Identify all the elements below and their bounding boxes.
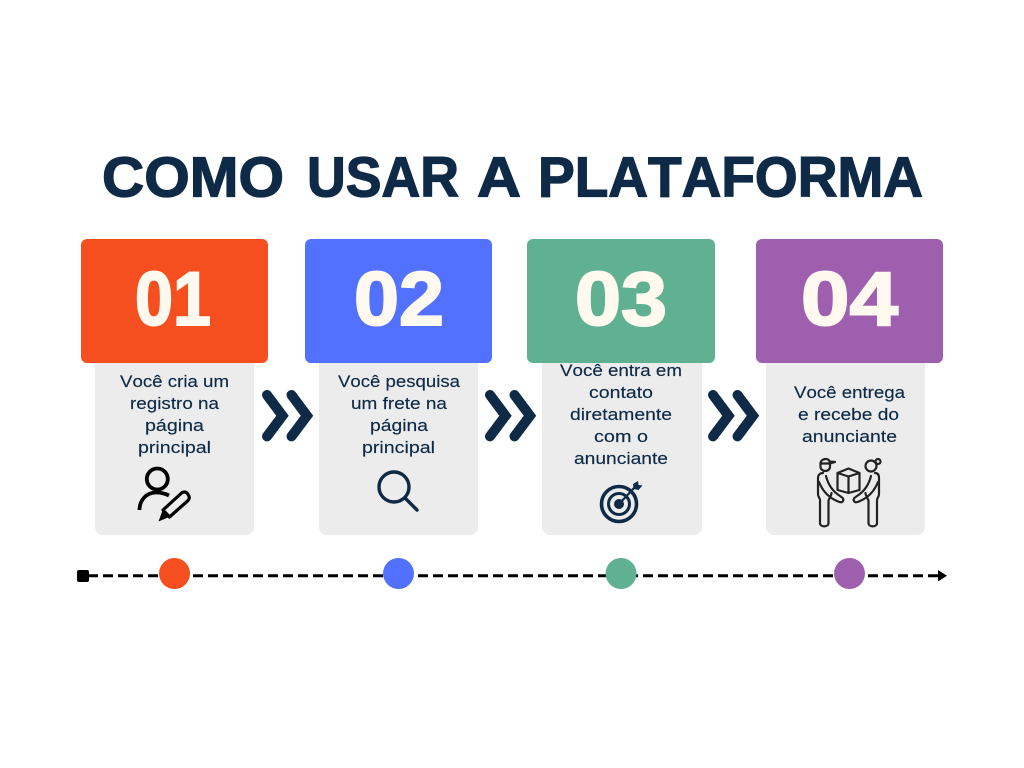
panel: step 1 <box>81 239 268 535</box>
step 1 text: principal <box>138 438 211 457</box>
title: PLATAFORMA <box>538 146 923 210</box>
timeline arrowhead <box>938 570 947 581</box>
step 1 text: Você cria um <box>120 372 229 391</box>
timeline marker 3 <box>606 558 636 589</box>
step 1 text <box>120 372 229 457</box>
step 3 text <box>560 361 682 468</box>
step 3 text: anunciante <box>574 449 668 468</box>
step 4 text: Você entrega <box>794 383 906 402</box>
step 2 text: página <box>370 416 429 435</box>
panel: step 3 <box>527 239 715 535</box>
step number 03: 03 <box>575 257 667 342</box>
step 4 text: anunciante <box>802 427 897 446</box>
timeline marker 4 <box>834 558 865 589</box>
step 3 text: contato <box>589 383 653 402</box>
title <box>102 146 923 210</box>
arrow: chevrons 1 <box>267 395 307 436</box>
step 3 text: com o <box>594 427 648 446</box>
timeline marker 2 <box>383 558 414 589</box>
step 2 text <box>338 372 461 457</box>
step 3 text: Você entra em <box>560 361 682 380</box>
step 2 text: principal <box>362 438 435 457</box>
step 3 text: diretamente <box>570 405 672 424</box>
step 4 text: e recebe do <box>798 405 899 424</box>
step number 01: 01 <box>135 257 211 342</box>
timeline marker 1 <box>159 558 190 589</box>
arrow: chevrons 3 <box>713 395 753 436</box>
timeline <box>77 558 947 589</box>
icon: user with pencil <box>140 468 189 521</box>
step 2 text: Você pesquisa <box>338 372 461 391</box>
step 1 text: página <box>145 416 205 435</box>
icon: target with dart <box>602 481 642 522</box>
step number 02: 02 <box>354 257 444 342</box>
icon: magnifying glass <box>379 472 417 510</box>
panel: step 4 <box>756 239 943 535</box>
panel: step 2 <box>305 239 492 535</box>
step number 04: 04 <box>801 257 898 342</box>
title: A <box>477 146 521 210</box>
icon: delivery handover <box>818 459 880 526</box>
step 1 text: registro na <box>130 394 220 413</box>
title: USAR <box>307 146 459 210</box>
title: COMO <box>102 146 284 210</box>
step 2 text: um frete na <box>351 394 448 413</box>
step 4 text <box>794 383 906 446</box>
timeline start marker <box>77 570 89 582</box>
arrow: chevrons 2 <box>490 395 530 436</box>
